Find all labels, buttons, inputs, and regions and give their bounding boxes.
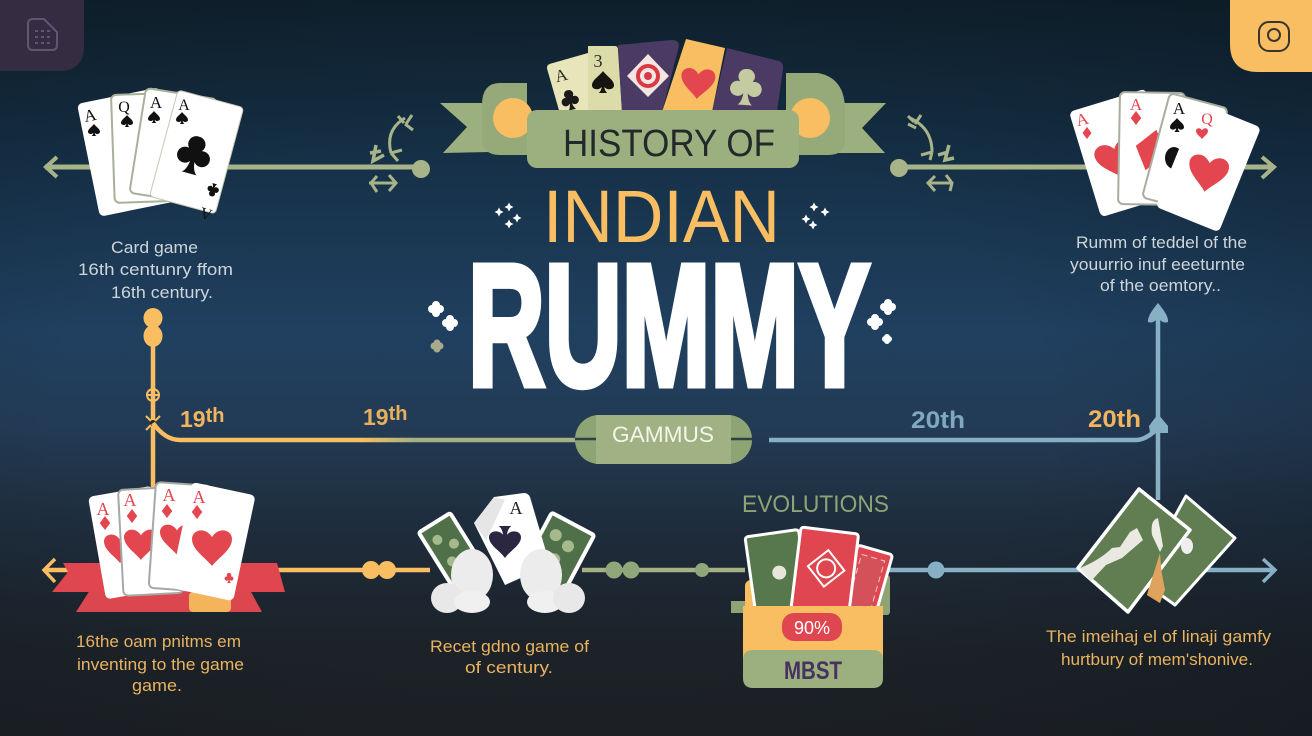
- label: 19th first: 19: [180, 406, 206, 432]
- card fan: spades and club: A: [178, 97, 190, 114]
- top right timeline arrow: [890, 157, 1274, 178]
- illustration: tilted green cards: [1078, 489, 1235, 612]
- corner tab: camera icon: [1230, 0, 1312, 72]
- bottom right caption: [1046, 627, 1272, 669]
- card fan: hearts and diamonds top right: A: [1130, 95, 1143, 114]
- left sprig ornament: [369, 115, 413, 192]
- bottom center caption: [430, 637, 589, 677]
- card fan: red hearts bottom left: A: [124, 490, 136, 510]
- title card fan: [546, 39, 783, 142]
- blue arrow top: [1148, 303, 1168, 322]
- wallet with cards: MBST: [784, 657, 842, 685]
- bottom timeline green segment: [582, 562, 745, 578]
- card fan: red hearts bottom left: [88, 482, 256, 601]
- top right caption: [1070, 233, 1247, 295]
- bottom left caption: 16the oam pnitms em: [76, 632, 241, 651]
- blue connector and vertical timeline: [769, 315, 1158, 500]
- card fan: spades and club: [77, 87, 244, 223]
- right sprig ornament: [908, 115, 954, 191]
- wallet with cards: [731, 527, 893, 688]
- card fan: spades and club: A: [198, 203, 214, 223]
- heading: indian: INDIAN: [543, 175, 780, 258]
- top left caption: [78, 238, 233, 302]
- gammus badge: [575, 415, 752, 464]
- corner tab: document icon: [0, 0, 84, 71]
- wallet with cards: 90%: [794, 618, 830, 638]
- heading: rummy: RUMMY: [468, 228, 870, 422]
- top left timeline arrow: [45, 157, 430, 178]
- card fan: red hearts bottom left: A: [162, 485, 176, 505]
- bottom right caption: The imeihaj el of linaji gamfy: [1046, 627, 1272, 646]
- bottom left caption: game.: [132, 676, 182, 695]
- label: 20th blue: 20th: [911, 407, 965, 434]
- illustration: cards held by gloves: A: [510, 498, 522, 518]
- card fan: hearts and diamonds top right: A: [1173, 99, 1186, 118]
- top right caption: youurrio inuf eeeturnte: [1070, 255, 1245, 274]
- bottom right caption: hurtbury of mem'shonive.: [1061, 650, 1253, 669]
- illustration: cards held by gloves: [416, 493, 597, 613]
- bottom center caption: Recet gdno game of: [430, 637, 589, 656]
- label: 20th orange: 20th: [1088, 406, 1141, 433]
- top left caption: 16th centunry ffom: [78, 260, 233, 279]
- title ribbon: [440, 73, 886, 168]
- card fan: spades and club: A: [82, 105, 99, 126]
- top left caption: 16th century.: [111, 283, 213, 302]
- sparkles around indian: [494, 202, 830, 230]
- card fan: red hearts bottom left: A: [192, 487, 206, 507]
- label: 19th second: 19: [363, 404, 389, 430]
- gammus badge: GAMMUS: [612, 422, 714, 447]
- bottom center caption: of century.: [465, 658, 553, 677]
- top left caption: Card game: [111, 238, 198, 257]
- bottom timeline orange segment: [44, 559, 430, 582]
- orange vertical timeline: [144, 308, 162, 500]
- top right caption: Rumm of teddel of the: [1076, 233, 1247, 252]
- card fan: hearts and diamonds top right: A: [1074, 109, 1091, 130]
- connector to gammus: [153, 423, 575, 440]
- title card fan: A: [553, 65, 570, 86]
- bottom left caption: inventing to the game: [77, 655, 244, 674]
- sparkles around rummy: [432, 303, 892, 349]
- card fan: spades and club: Q: [118, 99, 130, 116]
- label: 19th first: th: [206, 405, 224, 427]
- heading: history of: HISTORY OF: [563, 123, 775, 165]
- card fan: hearts and diamonds top right: [1069, 89, 1261, 232]
- card fan: hearts and diamonds top right: Q: [1201, 111, 1213, 128]
- bottom left caption: [76, 632, 244, 695]
- label: 19th second: th: [389, 403, 407, 425]
- heading: evolutions: EVOLUTIONS: [742, 491, 889, 518]
- blue arrow mid: [1149, 414, 1168, 433]
- card fan: spades and club: A: [150, 93, 163, 112]
- top right caption: of the oemtory..: [1100, 276, 1221, 295]
- card fan: red hearts bottom left: A: [96, 499, 110, 519]
- title card fan: 3: [594, 51, 602, 71]
- red ribbon under cards: [52, 563, 285, 612]
- bottom timeline blue segment: [885, 559, 1275, 582]
